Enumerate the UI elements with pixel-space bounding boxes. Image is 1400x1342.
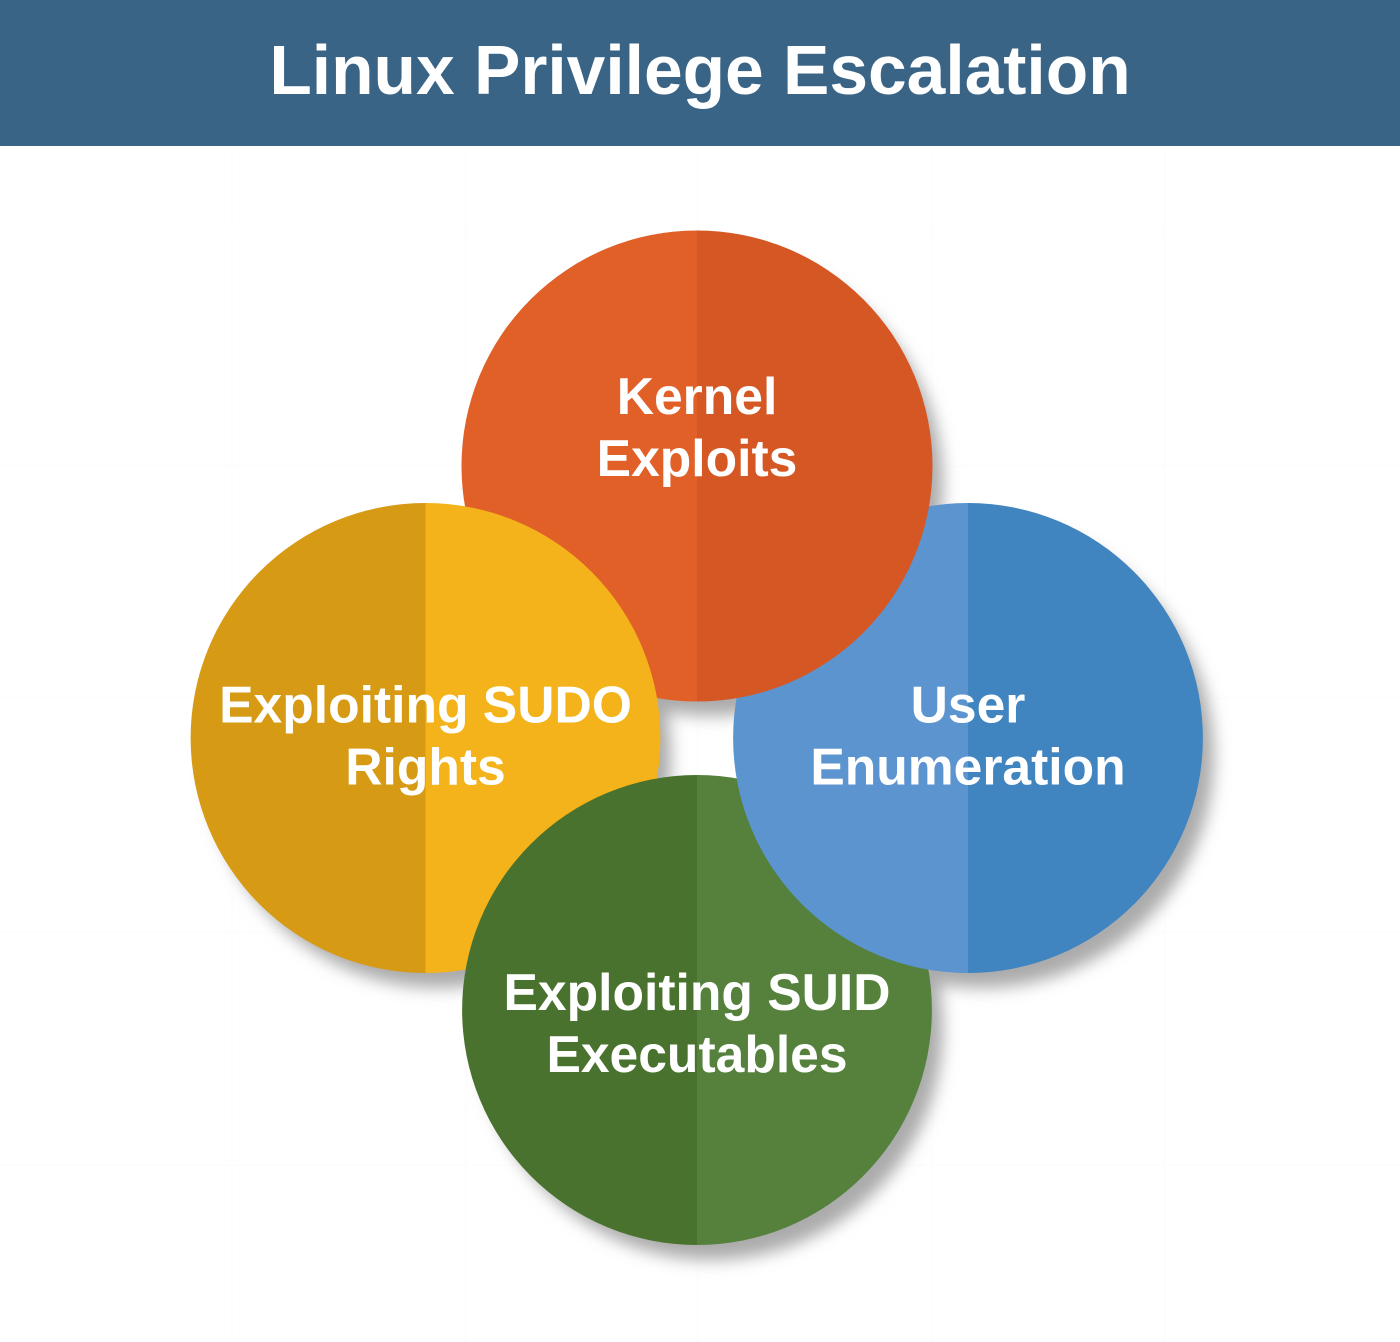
circle drop shadows xyxy=(207,252,1214,1260)
label: exploiting sudo rights: Exploiting SUDO xyxy=(219,676,632,734)
label: kernel exploits: Exploits xyxy=(597,429,797,487)
label: kernel exploits: Kernel xyxy=(617,367,777,425)
yellow circle overlap above orange xyxy=(463,506,658,700)
label: user enumeration: Enumeration xyxy=(810,738,1126,796)
circle: user enumeration (blue) xyxy=(733,503,1203,973)
circle: kernel exploits (orange) xyxy=(462,230,933,702)
label: exploiting suid executables: Exploiting SUID xyxy=(504,963,890,1021)
label: user enumeration: User xyxy=(911,676,1025,734)
title: Linux Privilege Escalation xyxy=(269,31,1131,109)
label: exploiting sudo rights: Rights xyxy=(345,738,506,796)
circle: exploiting sudo rights (yellow) xyxy=(191,503,660,973)
label: exploiting suid executables: Executables xyxy=(546,1025,848,1083)
circle: exploiting suid executables (green) xyxy=(462,775,932,1245)
title banner xyxy=(0,0,1400,146)
